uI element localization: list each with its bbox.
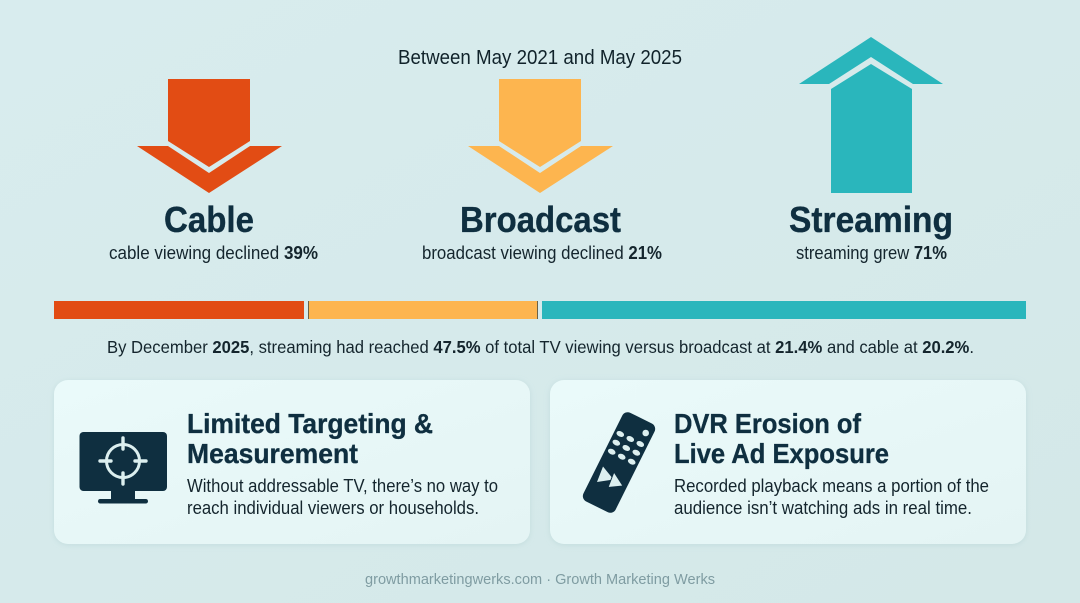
summary sentence: By December 2025, streaming had reached 47.5% of total TV viewing versus broadcast at 21.4% and cable at 20.2%.	[107, 337, 974, 357]
panel: dvr erosion card	[550, 380, 1026, 544]
icon: streaming up arrow	[799, 37, 943, 193]
icon: monitor with crosshair	[80, 432, 167, 504]
broadcast stat: broadcast viewing declined 21%	[422, 243, 662, 263]
icon: remote control	[581, 410, 657, 515]
card body: reach individual viewers or households.	[187, 498, 479, 518]
card body: Without addressable TV, there’s no way to	[187, 476, 498, 496]
card title: Limited Targeting &	[187, 408, 433, 439]
icon: broadcast down arrow	[468, 79, 613, 193]
card title: DVR Erosion of	[674, 408, 862, 439]
card title: Measurement	[187, 438, 358, 469]
panel: streaming	[789, 37, 953, 263]
panel: broadcast	[422, 79, 662, 263]
streaming heading: Streaming	[789, 199, 953, 240]
panel: limited targeting card	[54, 380, 530, 544]
card body	[674, 476, 989, 518]
card body: Recorded playback means a portion of the	[674, 476, 989, 496]
card body: audience isn’t watching ads in real time.	[674, 498, 972, 518]
cable heading: Cable	[164, 199, 254, 240]
cable stat: cable viewing declined 39%	[109, 243, 318, 263]
icon: cable down arrow	[137, 79, 282, 193]
broadcast heading: Broadcast	[460, 199, 621, 240]
card title	[674, 408, 889, 469]
stacked share bar	[54, 301, 1026, 319]
card body	[187, 476, 498, 518]
card title	[187, 408, 433, 469]
date range heading: Between May 2021 and May 2025	[398, 47, 682, 69]
footer source: growthmarketingwerks.com · Growth Marketing Werks	[365, 571, 715, 588]
card title: Live Ad Exposure	[674, 438, 889, 469]
streaming stat: streaming grew 71%	[796, 243, 947, 263]
panel: cable	[109, 79, 318, 263]
